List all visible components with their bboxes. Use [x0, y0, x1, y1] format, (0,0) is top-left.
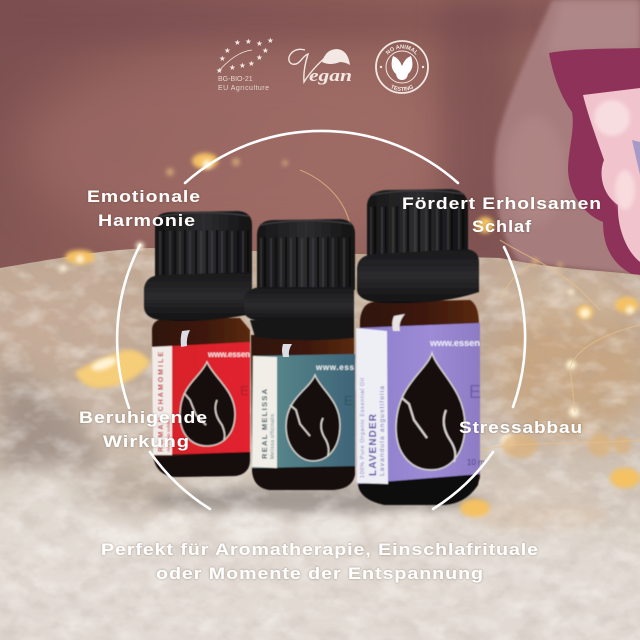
logo: EU organic leaf [216, 36, 274, 92]
label: 10 m [467, 458, 485, 467]
logo: Vegan [289, 49, 352, 85]
logo: Vegan: egan [309, 66, 352, 85]
label: ROMAN CHAMOMILE [158, 352, 165, 452]
benefit label: Stressabbau: Stressabbau [459, 419, 583, 437]
bottle: Lavender (purple) [356, 189, 485, 505]
label: REAL MELISSA [260, 388, 269, 459]
label: LAVENDER [368, 413, 379, 476]
logo: EU organic leaf: ★ [256, 53, 263, 62]
label: E [344, 393, 353, 408]
logo: EU organic leaf: ★ [219, 54, 226, 63]
bottom caption: Perfekt für Aromatherapie, Einschlafrituale [101, 541, 539, 559]
label: Lavandula angustifolia [379, 386, 386, 476]
drop icon [180, 362, 235, 446]
drop icon [396, 353, 465, 470]
cap [367, 189, 468, 262]
benefit label: Beruhigende Wirkung [79, 409, 208, 451]
benefit label: Fördert Erholsamen Schlaf [402, 195, 602, 236]
label: www.ess [315, 363, 355, 372]
glass highlights [181, 330, 292, 357]
label [152, 342, 250, 455]
label: E [240, 383, 249, 398]
label: www.essen [429, 338, 480, 349]
benefit label: Emotionale Harmonie [87, 188, 201, 230]
logo: EU organic leaf: ★ [256, 39, 263, 48]
label: E [469, 382, 481, 402]
logo: EU organic leaf: ★ [262, 46, 269, 55]
logo: EU organic leaf: ★ [224, 46, 231, 55]
label: 100% Pure Organic Essential Oil [360, 378, 366, 478]
benefit label: Fördert Erholsamen Schlaf: Schlaf [472, 218, 532, 236]
benefit label: Emotionale Harmonie: Emotionale [87, 188, 201, 206]
logo: no animal testing: TESTING [392, 84, 414, 91]
logo: EU organic leaf: ★ [229, 63, 236, 72]
logo: EU organic leaf: ★ [267, 36, 274, 45]
label: www.essen [207, 350, 250, 359]
logo: EU organic leaf: ★ [216, 66, 223, 75]
circular ring of arcs [117, 131, 525, 509]
logo: EU organic leaf: ★ [245, 37, 252, 46]
cap [257, 219, 355, 292]
fairy lights [60, 153, 640, 517]
collar [357, 249, 479, 303]
logo: no animal testing: NO ANIMAL [386, 44, 418, 55]
label [252, 354, 355, 468]
bottom caption [101, 541, 539, 583]
logo: EU organic leaf: ★ [234, 38, 241, 47]
label: Melissa officinalis [270, 414, 276, 459]
bottle: Real Melissa (teal) [244, 219, 355, 490]
logo: EU organic leaf: BG-BIO-21 [218, 76, 253, 83]
benefit label: Fördert Erholsamen Schlaf: Fördert Erholsamen [402, 195, 602, 213]
label: Anthemis nobilis [166, 418, 171, 452]
label [356, 323, 485, 484]
collar [144, 272, 252, 321]
logo: EU organic leaf: ★ [248, 59, 255, 68]
logo: no animal testing [375, 40, 429, 94]
fur [0, 248, 640, 640]
logo: EU organic leaf: EU Agriculture [218, 85, 269, 92]
bottle: Roman Chamomile (red) [144, 211, 252, 477]
benefit label: Beruhigende Wirkung: Wirkung [103, 433, 190, 451]
certification logos [216, 36, 429, 94]
collar [244, 287, 354, 324]
pillow [494, 0, 640, 275]
bottom caption: oder Momente der Entspannung [156, 565, 484, 583]
logo: EU organic leaf: ★ [239, 61, 246, 70]
benefit label: Emotionale Harmonie: Harmonie [98, 212, 196, 230]
benefit label: Beruhigende Wirkung: Beruhigende [79, 409, 208, 427]
drop icon [286, 375, 340, 461]
cap [155, 211, 252, 280]
